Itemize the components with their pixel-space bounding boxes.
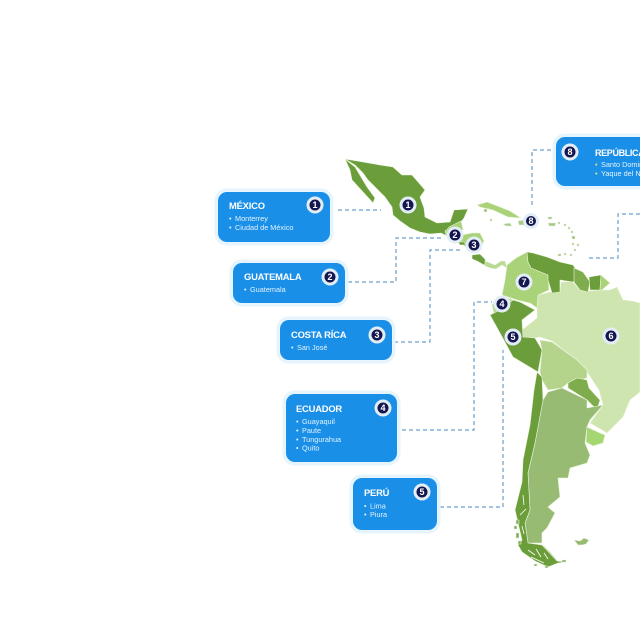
Falkland Islands	[574, 538, 589, 545]
panel: Perú: Piura	[370, 510, 388, 519]
connector: Perú	[440, 350, 503, 507]
country: Baja California	[345, 159, 375, 203]
country: Panama	[485, 261, 507, 269]
connector: México	[338, 209, 381, 211]
panel: Perú: PERÚ	[364, 487, 390, 498]
connector: Ecuador	[402, 302, 492, 430]
panel: Guatemala: GUATEMALA	[244, 271, 302, 282]
map marker 3	[467, 238, 481, 252]
panel: Perú: Lima	[370, 502, 387, 510]
panel: Ecuador: ECUADOR	[296, 403, 342, 414]
country: Suriname	[589, 275, 601, 290]
country: French Guiana	[600, 275, 610, 290]
panel: México: Ciudad de México	[235, 223, 293, 232]
panel: República Dominicana: •	[595, 160, 598, 169]
panel: Costa Rica: •	[291, 343, 294, 352]
country: Bolivia	[540, 340, 587, 390]
panel: Ecuador	[286, 394, 397, 462]
Caribbean small islands	[484, 209, 579, 256]
panel: República Dominicana: •	[595, 169, 598, 178]
country: Guyana	[574, 268, 590, 292]
map marker 3: 3	[471, 240, 477, 250]
panel: Costa Rica: 3	[374, 330, 380, 340]
panel: Ecuador: Quito	[302, 444, 319, 452]
map marker 2	[448, 228, 462, 242]
panel: Ecuador: •	[296, 417, 299, 426]
country: Honduras and Nicaragua	[459, 233, 484, 250]
country: Argentina	[525, 388, 603, 543]
country: Cuba	[477, 202, 521, 218]
country: Uruguay	[586, 427, 605, 446]
country: Jamaica and Hispaniola	[503, 220, 556, 226]
connector: República Dominicana	[532, 150, 551, 205]
panel: Guatemala: •	[244, 285, 247, 294]
panel: Guatemala	[233, 263, 345, 303]
panel: Perú: •	[364, 502, 367, 510]
panel: Perú: •	[364, 510, 367, 519]
panel: República Dominicana	[556, 137, 640, 186]
country: El Salvador	[458, 242, 466, 245]
map marker 1	[401, 198, 415, 212]
country: Costa Rica	[472, 254, 486, 265]
Chilean fjords	[520, 495, 548, 563]
panel: Ecuador: •	[296, 435, 299, 444]
panel: Ecuador: Guayaquil	[302, 417, 335, 426]
connector: Costa Rica	[394, 250, 461, 342]
panel: Costa Rica	[280, 320, 392, 360]
panel: México: 1	[312, 200, 318, 210]
country: Mexico	[345, 159, 468, 237]
map marker 7: 7	[521, 277, 527, 287]
map marker 5: 5	[510, 332, 516, 342]
panel: Perú	[353, 478, 437, 530]
map marker 6	[604, 329, 618, 343]
panel: México	[218, 192, 330, 242]
connector: Colombia panel	[587, 214, 640, 258]
panel: Ecuador: •	[296, 426, 299, 435]
panel: Guatemala: Guatemala	[250, 285, 287, 294]
panel: México: MÉXICO	[229, 200, 265, 211]
map of Latin America	[345, 159, 640, 568]
panel: Ecuador: Paute	[302, 426, 321, 435]
panel: México: •	[229, 214, 232, 223]
panel: Guatemala: 2	[327, 272, 333, 282]
country: Chile	[515, 372, 565, 567]
panel: México: Monterrey	[235, 214, 268, 223]
panel: República Dominicana: 8	[567, 147, 573, 157]
country: Tierra del Fuego	[543, 545, 557, 560]
map marker 4: 4	[499, 299, 505, 309]
panel: Perú: 5	[419, 487, 425, 497]
map marker 1: 1	[405, 200, 411, 210]
country: Guatemala	[445, 221, 463, 240]
country: Ecuador	[492, 296, 513, 318]
country: Brazil	[522, 282, 640, 433]
panel: Ecuador: 4	[380, 403, 386, 413]
map marker 2: 2	[452, 230, 458, 240]
panel: Costa Rica: COSTA RÍCA	[291, 329, 347, 340]
map marker 8: 8	[528, 216, 534, 226]
connector: Guatemala	[348, 238, 441, 282]
country: Paraguay	[568, 378, 600, 410]
map marker 6: 6	[608, 331, 614, 341]
panel: Ecuador: •	[296, 444, 299, 452]
map marker 4	[495, 297, 509, 311]
map marker 8	[524, 214, 538, 228]
country: Peru	[490, 300, 542, 372]
country: Venezuela	[527, 252, 580, 293]
map marker 5	[506, 330, 520, 344]
panel: Costa Rica: San José	[297, 343, 327, 352]
country: Colombia	[502, 252, 549, 308]
map marker 7	[517, 275, 531, 289]
panel: México: •	[229, 223, 232, 232]
Chilean southern islands	[514, 520, 566, 568]
panel: Ecuador: Tungurahua	[302, 435, 342, 444]
